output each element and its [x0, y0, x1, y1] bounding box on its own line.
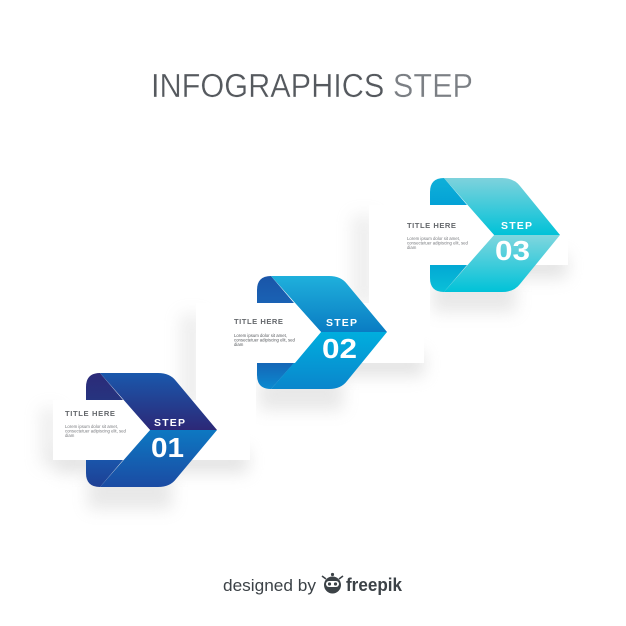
- step 3 body: diam: [407, 245, 417, 250]
- title: INFOGRAPHICS STEP: [151, 67, 473, 104]
- step 1 white panel: [53, 400, 250, 460]
- step 2 label: STEP: [326, 317, 357, 329]
- step 2 panel shadow: [180, 314, 204, 410]
- step 3: [352, 178, 568, 363]
- icon: freepik mascot: [322, 573, 343, 594]
- step 3 card: [369, 205, 494, 265]
- step 3 body: consectetuer adipiscing elit, sed: [407, 240, 469, 246]
- step 3 body: Lorem ipsum dolor sit amet,: [407, 236, 460, 241]
- step 2 title: TITLE HERE: [234, 317, 283, 326]
- step 2 body: diam: [234, 342, 244, 347]
- step 1 body: diam: [65, 433, 75, 438]
- step 3 arrow shadow: [432, 280, 516, 312]
- step 3 title: TITLE HERE: [407, 221, 456, 230]
- step 1 label: STEP: [154, 417, 185, 429]
- step 1 title: TITLE HERE: [65, 409, 115, 418]
- step 2 card: [196, 303, 321, 363]
- step 1 folded arrow: [86, 373, 217, 487]
- step 2: [180, 276, 424, 460]
- step 3 card shadow: [445, 254, 567, 278]
- step 3 panel shadow: [352, 215, 376, 305]
- step 3 number: 03: [495, 235, 530, 266]
- step 1 card shadow: [56, 449, 248, 473]
- step 1 left shadow: [40, 408, 60, 466]
- step 2 body: Lorem ipsum dolor sit amet,: [234, 333, 287, 338]
- step 1 card: [53, 400, 150, 460]
- step 2 folded arrow: [257, 276, 387, 389]
- step 2 white panel: [196, 303, 424, 460]
- step 2 number: 02: [322, 333, 357, 364]
- designed by: designed by: [223, 576, 317, 595]
- step 3 label: STEP: [501, 220, 532, 232]
- step 3 folded arrow: [430, 178, 560, 292]
- freepik wordmark: freepik: [346, 575, 403, 595]
- step 2 card shadow: [272, 352, 424, 376]
- step 2 body: consectetuer adipiscing elit, sed: [234, 338, 296, 342]
- footer credit: [223, 573, 403, 595]
- step 3 white panel: [369, 205, 568, 363]
- step 1: [40, 373, 250, 509]
- step 1 body: consectetuer adipiscing elit, sed: [65, 428, 127, 434]
- step 1 body: Lorem ipsum dolor sit amet,: [65, 424, 118, 429]
- step 1 arrow shadow: [88, 475, 172, 509]
- step 2 arrow shadow: [259, 378, 343, 410]
- step 1 number: 01: [151, 432, 184, 463]
